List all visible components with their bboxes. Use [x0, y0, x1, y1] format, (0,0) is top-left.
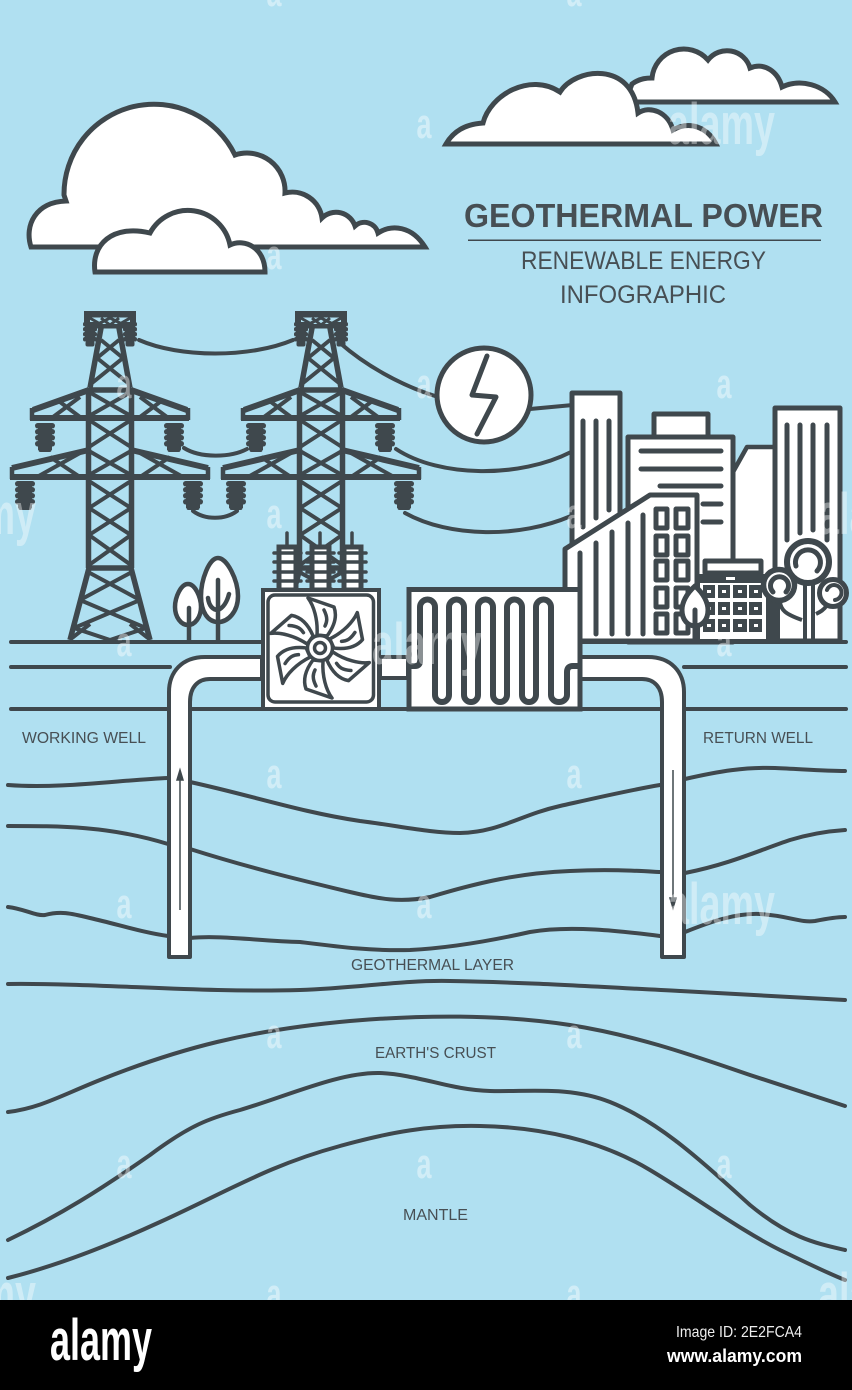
- building: low block: [698, 561, 768, 641]
- watermarks: alamy: [668, 872, 775, 937]
- fan blades: [269, 598, 371, 698]
- footer bar: [0, 1300, 852, 1390]
- cooling fan unit: [263, 590, 379, 709]
- icon: electricity symbol: [437, 348, 531, 442]
- website: www.alamy.com: [666, 1346, 802, 1366]
- ground lines: [11, 642, 846, 709]
- building: tall left: [572, 393, 620, 553]
- footer logo: alamy: [50, 1308, 152, 1373]
- power lines: [139, 340, 573, 532]
- cloud: upper right front: [446, 73, 716, 144]
- arrow: up: [177, 770, 183, 910]
- title: GEOTHERMAL POWER: [464, 197, 823, 234]
- watermarks: alamy: [372, 612, 482, 677]
- pipe: working well: [169, 657, 262, 957]
- label: return well: RETURN WELL: [703, 730, 813, 747]
- title block: [464, 197, 823, 309]
- window grid: [656, 509, 688, 633]
- cloud: large left: [29, 104, 425, 247]
- label: earth's crust: EARTH'S CRUST: [375, 1045, 497, 1062]
- building: middle: [628, 414, 733, 642]
- label: working well: WORKING WELL: [22, 730, 146, 747]
- label: mantle: MANTLE: [403, 1207, 468, 1224]
- transmission tower right: [221, 311, 421, 640]
- pipe: connector: [380, 657, 408, 678]
- label: geothermal layer: GEOTHERMAL LAYER: [351, 957, 514, 974]
- trees by buildings: [682, 541, 846, 641]
- cloud: far right back: [625, 49, 835, 102]
- transmission tower left: [10, 311, 210, 640]
- watermarks: alamy: [668, 92, 775, 157]
- heat exchanger: [409, 590, 580, 709]
- building: right tower: [775, 408, 840, 641]
- rock strata lines: [8, 768, 845, 1280]
- arrow: down: [670, 770, 676, 908]
- pipe: return well: [580, 657, 684, 957]
- image id: Image ID: 2E2FCA4: [676, 1324, 802, 1341]
- serpentine coil: [410, 600, 580, 702]
- building: angled back: [733, 447, 780, 641]
- icon: trees left: [175, 558, 238, 641]
- transformers: [274, 533, 366, 590]
- city buildings: [565, 393, 846, 642]
- subtitle line one: RENEWABLE ENERGY: [521, 247, 766, 275]
- cloud: small left foreground: [95, 210, 265, 272]
- building: front slanted: [565, 495, 697, 641]
- subtitle line two: INFOGRAPHIC: [560, 281, 726, 309]
